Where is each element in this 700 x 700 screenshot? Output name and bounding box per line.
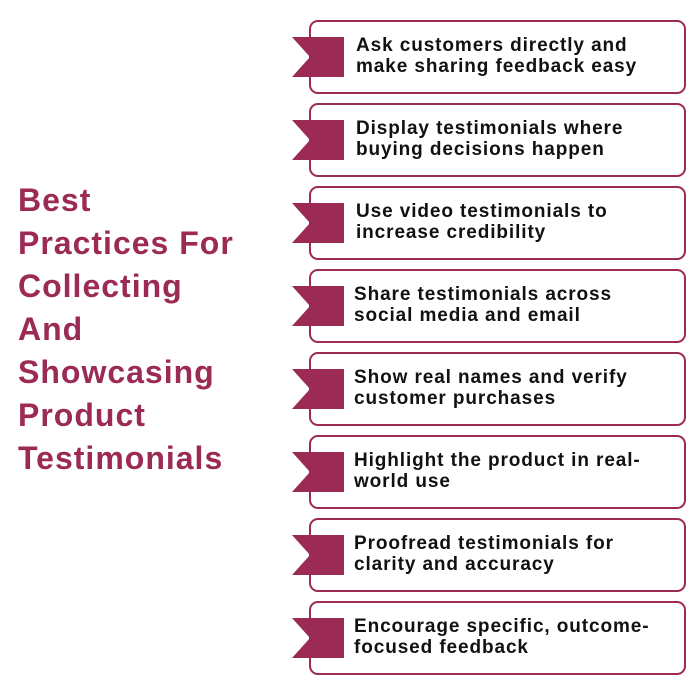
ribbon 6 — [292, 452, 344, 492]
text 6: Highlight the product in real- — [354, 450, 641, 471]
ribbon 1 — [292, 37, 344, 77]
text 3 — [356, 201, 608, 243]
item 8 — [309, 601, 686, 675]
text 7: Proofread testimonials for — [354, 533, 614, 554]
title: Collecting — [18, 268, 183, 304]
text 3: increase credibility — [356, 222, 546, 243]
title — [18, 182, 234, 476]
text 1: Ask customers directly and — [356, 35, 628, 56]
text 4: Share testimonials across — [354, 284, 612, 305]
text 6 — [354, 450, 641, 492]
item 4 — [309, 269, 686, 343]
ribbon 4 — [292, 286, 344, 326]
text 5: customer purchases — [354, 388, 556, 409]
item 6 — [309, 435, 686, 509]
item 3 — [309, 186, 686, 260]
text 4: social media and email — [354, 305, 581, 326]
title: Best — [18, 182, 91, 218]
text 4 — [354, 284, 612, 326]
text 1: make sharing feedback easy — [356, 56, 637, 77]
text 5 — [354, 367, 628, 409]
text 8: Encourage specific, outcome- — [354, 616, 650, 637]
item 2 — [309, 103, 686, 177]
text 7 — [354, 533, 614, 575]
item 5 — [309, 352, 686, 426]
title: Testimonials — [18, 440, 223, 476]
text 6: world use — [354, 471, 451, 492]
title: Practices For — [18, 225, 234, 261]
text 3: Use video testimonials to — [356, 201, 608, 222]
text 5: Show real names and verify — [354, 367, 628, 388]
title: And — [18, 311, 83, 347]
title: Showcasing — [18, 354, 215, 390]
ribbon 8 — [292, 618, 344, 658]
text 2: Display testimonials where — [356, 118, 623, 139]
text 8: focused feedback — [354, 637, 529, 658]
text 7: clarity and accuracy — [354, 554, 555, 575]
text 2 — [356, 118, 623, 160]
text 1 — [356, 35, 637, 77]
item 1 — [309, 20, 686, 94]
item 7 — [309, 518, 686, 592]
ribbon 2 — [292, 120, 344, 160]
title: Product — [18, 397, 146, 433]
text 2: buying decisions happen — [356, 139, 605, 160]
text 8 — [354, 616, 650, 658]
ribbon 3 — [292, 203, 344, 243]
ribbon 5 — [292, 369, 344, 409]
ribbon 7 — [292, 535, 344, 575]
